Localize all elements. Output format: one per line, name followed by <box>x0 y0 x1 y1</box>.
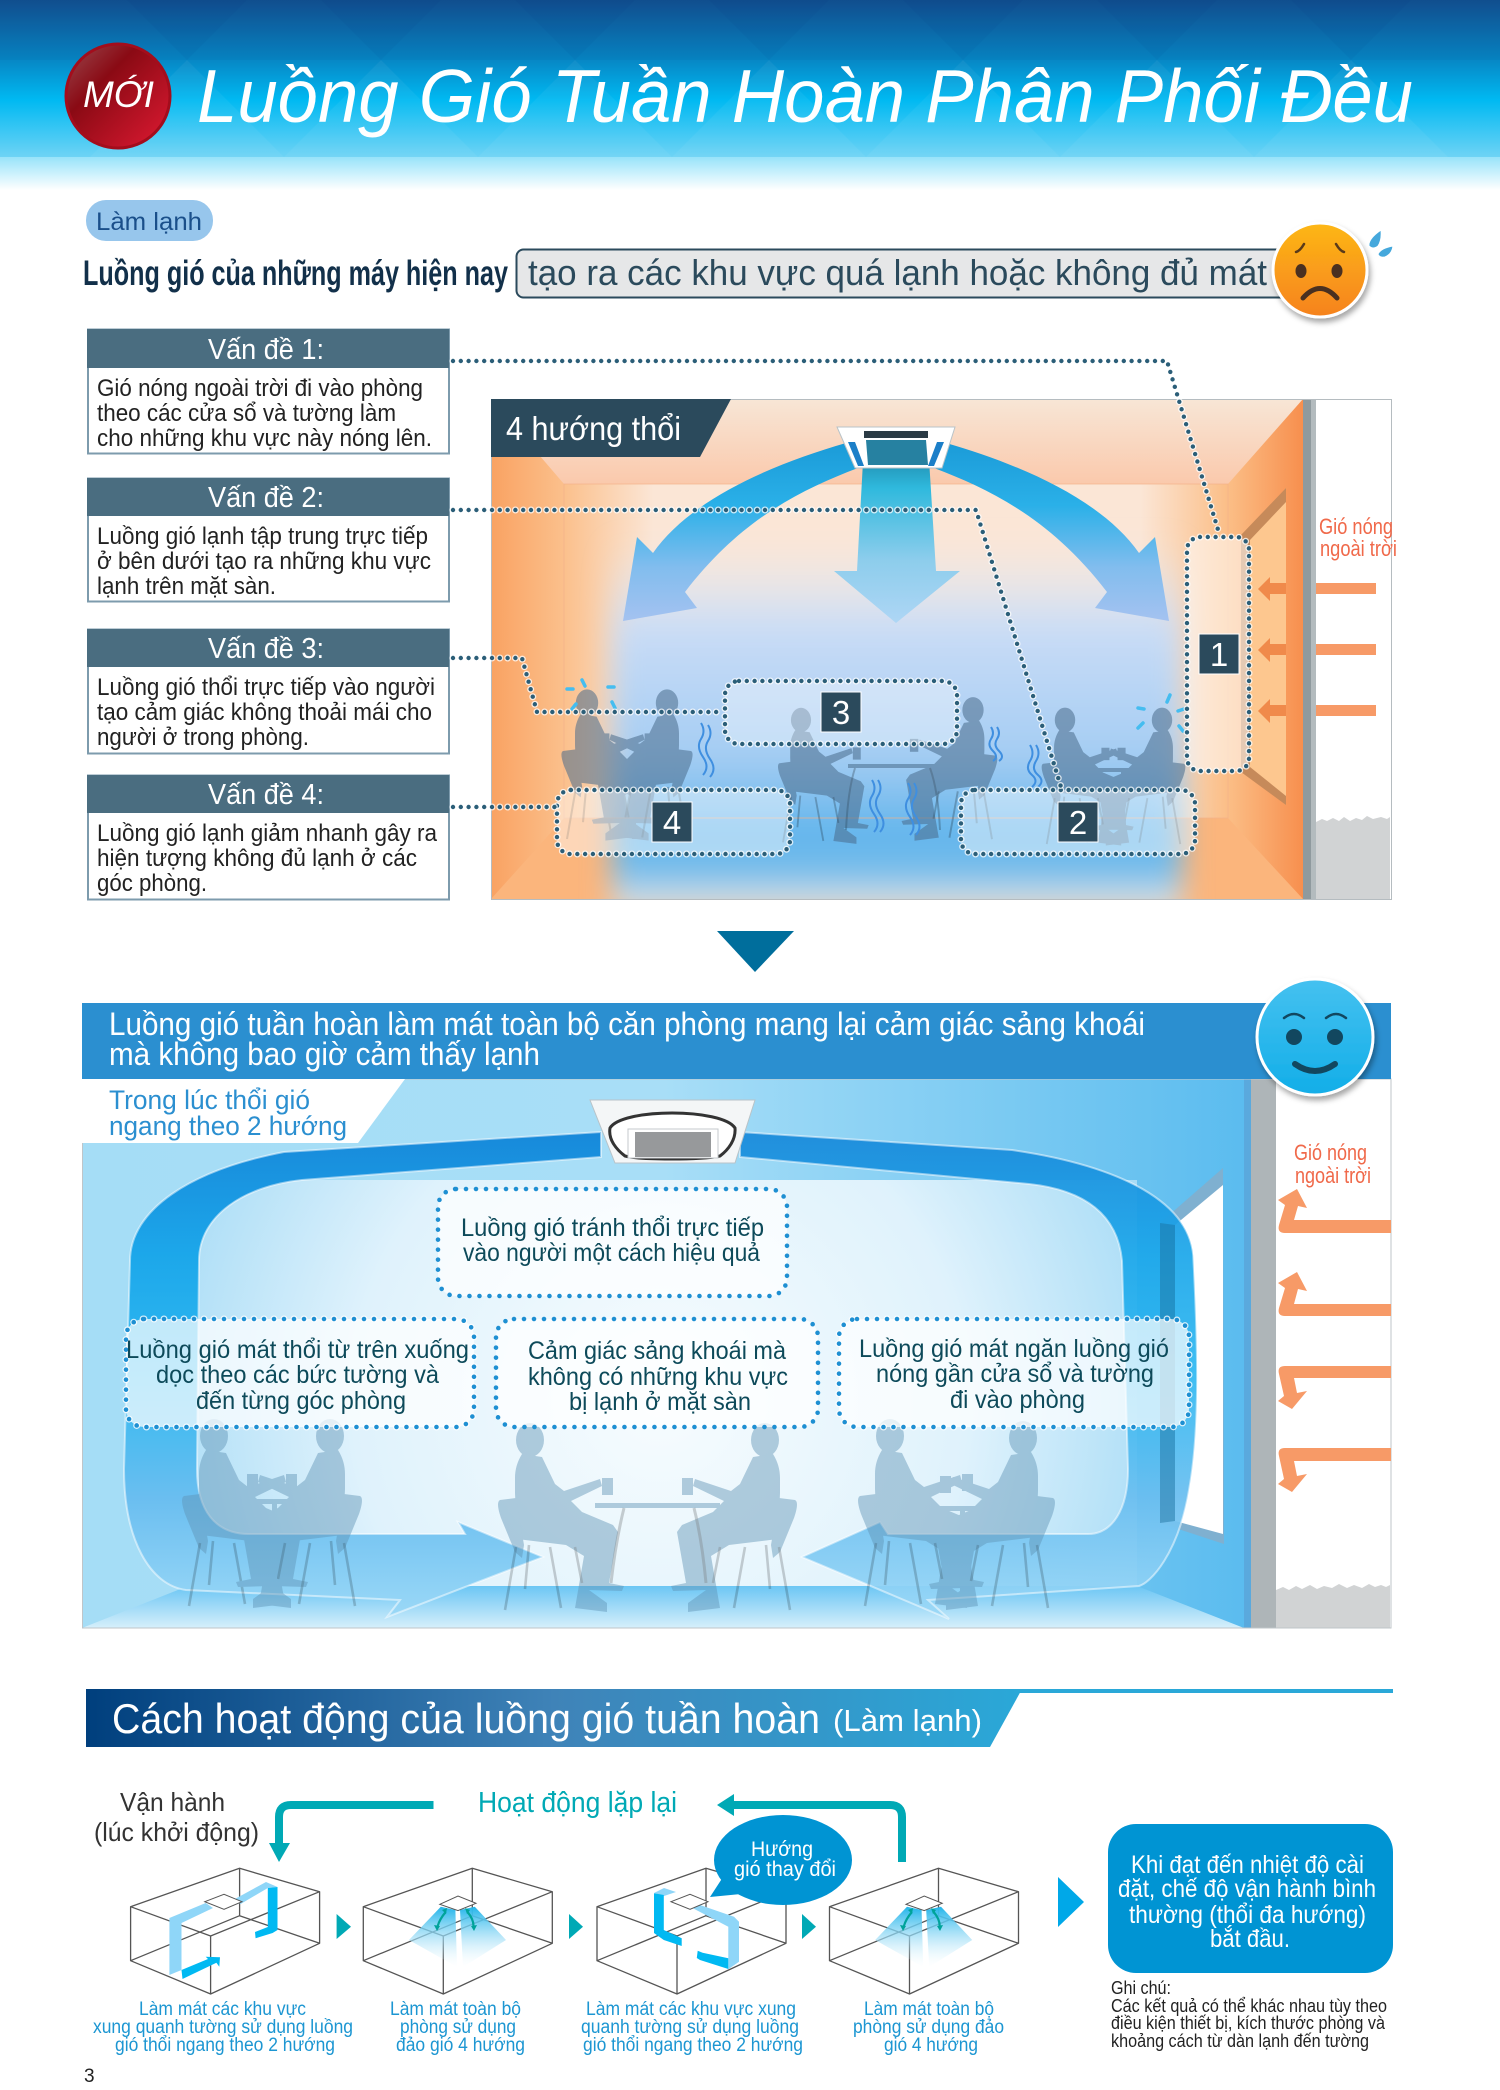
panel: issue 3: người ở trong phòng. <box>97 724 309 751</box>
step captions: gió thổi ngang theo 2 hướng <box>583 2035 803 2056</box>
window frame over airflow <box>1160 1223 1175 1523</box>
zone 2 <box>961 790 1195 854</box>
note: top-down along walls: Luồng gió mát thổi từ trên xuống <box>126 1336 469 1364</box>
arrow: repeat into start <box>269 1805 434 1862</box>
panel: issue 1: theo các cửa sổ và tường làm <box>97 400 396 427</box>
badge: new <box>66 44 170 148</box>
zone 4 <box>557 790 790 854</box>
arrow: step 2 to 3 <box>569 1914 583 1939</box>
problem heading: Luồng gió của những máy hiện nay <box>83 254 508 293</box>
number markers: 1 <box>1210 636 1228 673</box>
panel: issue 3 <box>87 629 449 754</box>
bubble: direction changes <box>710 1815 852 1905</box>
dotted leader lines <box>453 361 1219 807</box>
note: avoid direct blowing: Luồng gió tránh thổi trực tiếp <box>461 1214 764 1242</box>
callout: normal operation: bắt đầu. <box>1210 1924 1290 1953</box>
hot air label: ngoài trời <box>1295 1163 1371 1188</box>
footnote: điều kiện thiết bị, kích thước phòng và <box>1111 2013 1386 2033</box>
panel: issue 3: tạo cảm giác không thoải mái cho <box>97 699 432 726</box>
arrow: repeat return <box>717 1794 902 1862</box>
number markers: 3 <box>832 694 850 731</box>
cassette air conditioner <box>837 427 955 468</box>
panel header: benefit statement <box>82 1003 1391 1079</box>
step captions <box>93 1999 1004 2056</box>
note: avoid direct blowing <box>438 1189 787 1296</box>
diagram: step 2 <box>363 1868 552 1994</box>
panel: issue 2 <box>87 478 449 602</box>
step captions: đảo gió 4 hướng <box>396 2035 525 2056</box>
step captions: phòng sử dụng <box>400 2017 516 2038</box>
icon: happy face <box>1257 979 1373 1095</box>
panel: issue 1: Vấn đề 1: <box>208 334 324 366</box>
badge: new: MỚI <box>83 74 154 115</box>
title: Luồng Gió Tuần Hoàn Phân Phối Đều <box>197 54 1413 138</box>
note: top-down along walls: đến từng góc phòng <box>196 1387 406 1415</box>
start label <box>94 1787 259 1847</box>
window <box>1241 488 1286 805</box>
step captions: xung quanh tường sử dụng luồng <box>93 2017 353 2038</box>
footnote <box>1111 1978 1387 2051</box>
airflow mode tag: 4 hướng thổi <box>506 410 681 447</box>
note: avoid direct blowing: vào người một cách hiệu quả <box>463 1239 760 1267</box>
tab: blowing mode <box>82 1079 405 1143</box>
arrow: to normal operation <box>1058 1877 1084 1927</box>
hot air label: Gió nóng <box>1319 514 1393 539</box>
step captions: Làm mát toàn bộ <box>864 1999 994 2020</box>
note: blocks hot air: Luồng gió mát ngăn luồng gió <box>859 1335 1169 1363</box>
arrow: center downflow <box>834 443 960 623</box>
room background <box>491 399 1392 915</box>
panel header: benefit statement: mà không bao giờ cảm thấy lạnh <box>109 1036 540 1072</box>
hot air label: Gió nóng <box>1294 1140 1367 1165</box>
cooling pill: Làm lạnh <box>96 208 202 236</box>
step captions: gió 4 hướng <box>884 2035 978 2056</box>
section heading: (Làm lạnh) <box>833 1703 982 1738</box>
panel: issue 1: cho những khu vực này nóng lên. <box>97 425 432 452</box>
panel: issue 3: Vấn đề 3: <box>208 633 324 665</box>
arrow: step 3 to 4 <box>802 1914 816 1939</box>
number markers <box>652 634 1239 842</box>
cassette air conditioner <box>590 1100 755 1163</box>
start label: (lúc khởi động) <box>94 1817 259 1847</box>
zone 3 <box>725 681 957 744</box>
note: blocks hot air <box>839 1319 1189 1427</box>
arrow: right curved airflow <box>934 443 1169 621</box>
hot air label <box>1294 1140 1371 1188</box>
diagram: step 3 <box>597 1868 786 1994</box>
room background <box>82 1079 1391 1628</box>
cooling pill <box>86 200 213 241</box>
step captions: Làm mát các khu vực xung <box>586 1999 796 2020</box>
step captions: Làm mát toàn bộ <box>390 1999 521 2020</box>
number markers: 4 <box>663 804 681 841</box>
panel: issue 4 <box>87 775 449 900</box>
window <box>1160 1168 1224 1544</box>
panel: issue 4: Luồng gió lạnh giảm nhanh gây ra <box>97 820 438 847</box>
panel: issue 2: Luồng gió lạnh tập trung trực tiếp <box>97 523 428 550</box>
note: no cold floor: không có những khu vực <box>528 1363 788 1391</box>
arrow: transition down <box>717 931 794 972</box>
note: top-down along walls <box>126 1319 474 1427</box>
panel: issue 2: Vấn đề 2: <box>208 482 324 514</box>
page number: 3 <box>84 2066 95 2087</box>
panel: issue 4: góc phòng. <box>97 870 207 897</box>
office silhouettes <box>182 1419 1055 1612</box>
hot air label <box>1319 514 1397 561</box>
arrow: left curved airflow <box>623 443 858 621</box>
section heading: Cách hoạt động của luồng gió tuần hoàn <box>112 1695 820 1742</box>
section heading <box>86 1689 1393 1747</box>
panel: issue 1: Gió nóng ngoài trời đi vào phòng <box>97 375 423 402</box>
airflow mode tag <box>491 399 731 457</box>
footnote: Các kết quả có thể khác nhau tùy theo <box>1111 1996 1387 2016</box>
callout: normal operation: Khi đạt đến nhiệt độ cài <box>1131 1851 1364 1879</box>
panel: issue 1 <box>87 329 449 454</box>
hot air arrows <box>1258 577 1376 723</box>
footnote: Ghi chú: <box>1111 1978 1171 1998</box>
number markers: 2 <box>1069 804 1087 841</box>
header banner <box>0 0 1500 190</box>
step captions: Làm mát các khu vực <box>139 1999 306 2020</box>
hot air arrows <box>1278 1189 1391 1492</box>
panel: circulation airflow room <box>82 1079 1391 1628</box>
bubble: direction changes: Hướng <box>751 1838 813 1861</box>
panel: issue 3: Luồng gió thổi trực tiếp vào người <box>97 674 435 701</box>
circulation band: left <box>124 1132 601 1617</box>
note: no cold floor: Cảm giác sảng khoái mà <box>528 1337 786 1365</box>
tab: blowing mode: Trong lúc thổi gió <box>109 1085 310 1115</box>
circulation band: right <box>740 1132 1197 1619</box>
icon: sad face <box>1273 223 1393 317</box>
cold wave lines <box>699 723 1042 835</box>
step captions: quanh tường sử dụng luồng <box>581 2017 799 2038</box>
start label: Vận hành <box>120 1787 225 1817</box>
zone 1 <box>1187 537 1249 771</box>
bubble: direction changes: gió thay đổi <box>734 1858 836 1881</box>
office silhouettes <box>561 689 1185 846</box>
note: no cold floor <box>496 1319 818 1427</box>
panel: issue 2: lạnh trên mặt sàn. <box>97 573 276 600</box>
callout: normal operation <box>1108 1824 1393 1973</box>
tab: blowing mode: ngang theo 2 hướng <box>109 1111 347 1141</box>
step captions: phòng sử dụng đảo <box>853 2017 1004 2038</box>
step captions: gió thổi ngang theo 2 hướng <box>115 2035 335 2056</box>
callout: normal operation: đặt, chế độ vận hành bình <box>1118 1875 1376 1903</box>
note: blocks hot air: đi vào phòng <box>950 1386 1085 1414</box>
problem statement box: tạo ra các khu vực quá lạnh hoặc không đủ mát <box>528 252 1267 293</box>
panel header: benefit statement: Luồng gió tuần hoàn làm mát toàn bộ căn phòng mang lại cảm giác sảng khoái <box>109 1006 1145 1042</box>
note: top-down along walls: dọc theo các bức tường và <box>156 1361 439 1389</box>
diagram: step 4 <box>830 1868 1018 1994</box>
panel: issue 2: ở bên dưới tạo ra những khu vực <box>97 548 431 575</box>
arrow: step 1 to 2 <box>337 1914 351 1939</box>
panel: issue 4: Vấn đề 4: <box>208 779 324 811</box>
note: blocks hot air: nóng gần cửa sổ và tường <box>876 1360 1154 1388</box>
repeat label: Hoạt động lặp lại <box>478 1787 677 1819</box>
sweat drops <box>567 680 1184 731</box>
diagram: step 1 <box>131 1868 320 1994</box>
footnote: khoảng cách từ dàn lạnh đến tường <box>1111 2031 1369 2051</box>
panel: issue 4: hiện tượng không đủ lạnh ở các <box>97 845 417 872</box>
panel: 4-way airflow room <box>491 399 1397 915</box>
hot air label: ngoài trời <box>1320 536 1397 561</box>
callout: normal operation: thường (thổi đa hướng) <box>1129 1901 1366 1929</box>
note: no cold floor: bị lạnh ở mặt sàn <box>569 1388 751 1416</box>
